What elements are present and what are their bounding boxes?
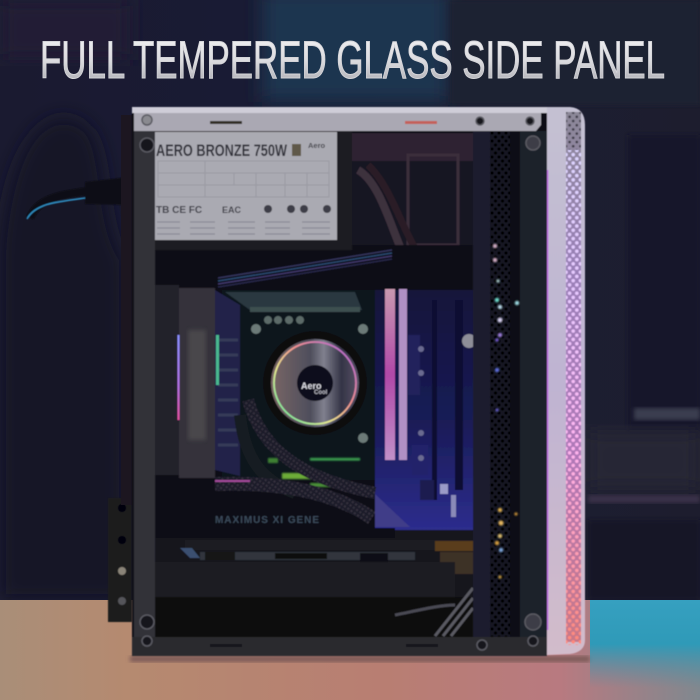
upper chamber behind PSU bbox=[352, 133, 473, 320]
PSU with label bbox=[155, 131, 352, 250]
certification icons bbox=[156, 205, 331, 216]
radiator and fan bbox=[155, 285, 240, 478]
black pillar and perforated strip bbox=[473, 131, 547, 637]
CPU cooler pump: Cool bbox=[314, 390, 328, 396]
label small print bbox=[157, 222, 330, 234]
lower chamber bbox=[155, 588, 473, 637]
case side edge bbox=[121, 115, 133, 505]
top slots bbox=[210, 121, 242, 124]
pump logo: Aero bbox=[301, 381, 322, 391]
VRM heatsink bbox=[225, 292, 362, 324]
motherboard lower text: MAXIMUS XI GENE bbox=[215, 515, 320, 526]
PSU model name: AERO BRONZE 750W bbox=[156, 141, 288, 160]
case body interior bbox=[132, 110, 547, 655]
green board glow bbox=[268, 458, 360, 487]
sata cables top bbox=[218, 250, 392, 287]
white front panel bbox=[547, 107, 585, 655]
bottom frame bbox=[132, 637, 547, 656]
Aerocool logo: Aero bbox=[308, 141, 326, 150]
coolant tubes bbox=[215, 400, 410, 527]
top frame bbox=[132, 107, 547, 131]
frame screws bbox=[140, 115, 541, 650]
certification icons: TB CE FC bbox=[156, 205, 202, 216]
glass left frame bbox=[134, 131, 155, 641]
motherboard bbox=[155, 245, 476, 545]
CPU cooler pump bbox=[263, 331, 367, 435]
front LED dots bbox=[566, 150, 581, 645]
computer case bbox=[132, 107, 585, 656]
RAM sticks bbox=[385, 289, 407, 460]
PSU spec grid bbox=[158, 161, 329, 197]
pillar lights bbox=[493, 244, 519, 578]
left side bracket with screws bbox=[108, 498, 132, 622]
power cable bbox=[27, 177, 128, 219]
PSU label bbox=[155, 132, 337, 240]
certification icons: EAC bbox=[222, 205, 242, 215]
graphics card bbox=[155, 528, 473, 600]
table top bbox=[0, 600, 700, 700]
